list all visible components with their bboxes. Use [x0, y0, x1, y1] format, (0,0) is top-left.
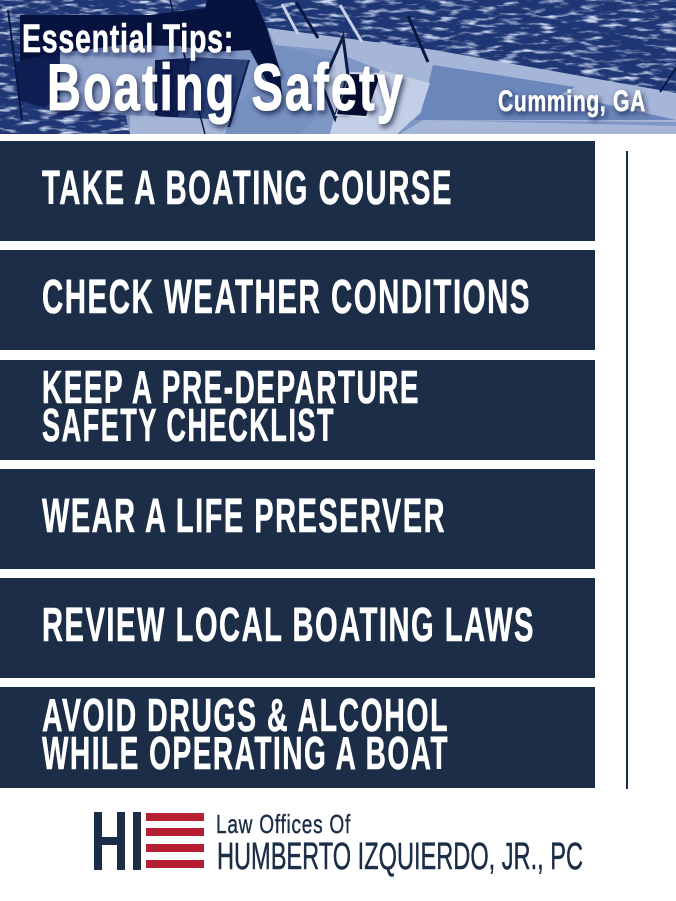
- panel: review local boating laws: [0, 578, 595, 678]
- panel: pre-departure checklist: KEEP A PRE-DEPARTURE: [42, 361, 420, 413]
- heading: Essential Tips: Essential Tips:: [22, 17, 234, 61]
- heading: Boating Safety: Boating Safety: [47, 50, 405, 124]
- panel: pre-departure checklist: SAFETY CHECKLIST: [42, 399, 335, 451]
- photo: sea water: [0, 0, 676, 134]
- photo: dark canopy: [16, 0, 282, 108]
- photo: railing posts: [8, 0, 676, 134]
- panel: pre-departure checklist: [0, 360, 595, 460]
- firm name small: Law Offices Of: [216, 809, 351, 839]
- logo: law offices: [94, 809, 583, 878]
- panel: take a boating course: [0, 141, 595, 241]
- panel: check weather conditions: [0, 250, 595, 350]
- header banner: [0, 0, 676, 134]
- panel: avoid drugs and alcohol: [0, 687, 595, 788]
- panel: wear a life preserver: [0, 469, 595, 569]
- icon: HI monogram with stripes: [94, 812, 204, 870]
- photo: boat deck: [60, 28, 676, 134]
- photo: open hatch: [322, 37, 382, 118]
